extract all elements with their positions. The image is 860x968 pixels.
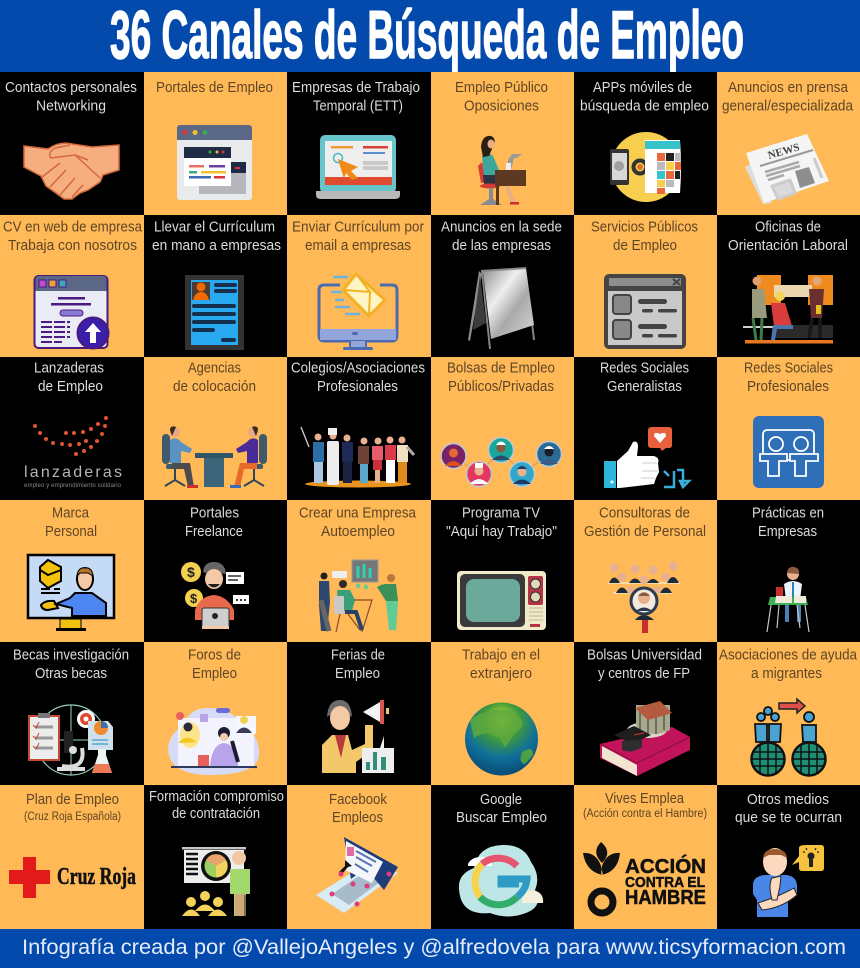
icon: Cruz Roja logo [9, 857, 136, 898]
heading: Bolsas de Empleo [447, 360, 555, 376]
heading: Oposiciones [464, 98, 539, 114]
heading [5, 79, 137, 114]
heading: Gestión de Personal [584, 523, 706, 540]
panel: Bolsas Universidad [574, 642, 717, 785]
panel: Foros de Empleo [144, 642, 287, 785]
icon: lanzaderas logo [24, 416, 122, 489]
heading: Empleo Público [455, 79, 548, 96]
icon: retro television [457, 571, 546, 630]
heading: (Acción contra el Hambre) [583, 808, 707, 820]
icon: CV sheet [185, 275, 244, 350]
heading: Profesionales [747, 378, 829, 395]
icon: training presentation [182, 847, 250, 917]
heading: Agencias [188, 360, 241, 376]
panel: Asociaciones de ayuda a migrantes [717, 642, 860, 785]
panel: Vives Emplea [574, 785, 717, 929]
heading: Lanzaderas [34, 360, 104, 376]
heading: Redes Sociales [744, 360, 833, 376]
panel: Bolsas de Empleo Públicos/Privadas [431, 357, 574, 500]
heading [587, 646, 702, 682]
heading: Trabajo en el [462, 646, 540, 664]
heading [292, 79, 420, 114]
icon: thumbs up [604, 427, 689, 488]
icon: thinking man [753, 845, 824, 917]
heading [34, 360, 104, 395]
heading: Otros medios [747, 791, 829, 808]
heading: Trabaja con nosotros [8, 237, 137, 254]
icon: student at desk [767, 567, 809, 632]
icon: Acción contra el Hambre logo: HAMBRE [625, 887, 706, 909]
heading [331, 646, 385, 682]
heading: búsqueda de empleo [580, 98, 709, 114]
icon: research tools [29, 705, 113, 775]
heading: de colocación [173, 378, 256, 395]
heading: CV en web de empresa [3, 219, 143, 236]
panel: Otros medios [717, 785, 860, 929]
icon: service window [604, 274, 686, 349]
heading [447, 360, 555, 395]
icon: handshake [24, 143, 119, 199]
heading: Generalistas [607, 378, 682, 395]
heading: APPs móviles de [593, 79, 692, 96]
heading [591, 219, 698, 254]
heading [580, 79, 709, 114]
heading: de las empresas [452, 237, 551, 254]
heading [455, 79, 548, 114]
icon: Acción contra el Hambre logo: CONTRA EL [625, 875, 705, 891]
heading: Networking [36, 98, 106, 114]
icon: candidates under magnifier [608, 562, 680, 633]
panel: Google Buscar Empleo [431, 785, 574, 929]
heading: Programa TV [462, 504, 540, 522]
heading: Crear una Empresa [299, 504, 417, 522]
heading: extranjero [470, 665, 532, 682]
heading [583, 790, 707, 820]
icon: woman at desk [478, 136, 526, 205]
heading: Servicios Públicos [591, 219, 698, 236]
icon: A-board [468, 267, 535, 349]
heading: de contratación [172, 805, 260, 822]
panel: CV en web de empresa [0, 215, 144, 357]
heading: "Aquí hay Trabajo" [446, 523, 557, 540]
icon: monitor and envelope [319, 274, 397, 350]
panel: Agencias de colocación [144, 357, 287, 500]
panel: Crear una Empresa Autoempleo [287, 500, 431, 642]
heading: Formación compromiso [149, 788, 284, 805]
heading [45, 504, 97, 540]
heading [446, 504, 557, 540]
heading: Google [480, 791, 522, 808]
heading [719, 646, 858, 682]
heading: Empresas [758, 523, 817, 540]
icon: Google G on a cloud [459, 845, 543, 916]
heading [185, 504, 243, 540]
header band [0, 0, 860, 73]
heading [292, 219, 424, 254]
panel: Marca Personal [0, 500, 144, 642]
heading [744, 360, 833, 395]
panel: Anuncios en la sede [431, 215, 574, 357]
panel: Llevar el Currículum [144, 215, 287, 357]
heading: Facebook [329, 791, 387, 808]
heading [152, 219, 281, 254]
heading: Foros de [188, 646, 241, 664]
heading: Empleo [335, 665, 380, 682]
heading [24, 791, 121, 823]
heading [462, 646, 540, 682]
panel: Consultoras de Gestión de Personal [574, 500, 717, 642]
icon: job interview [162, 426, 267, 488]
heading: en mano a empresas [152, 237, 281, 254]
heading [13, 646, 129, 682]
panel: Programa TV [431, 500, 574, 642]
panel: Trabajo en el extranjero [431, 642, 574, 785]
icon: lanzaderas logo: lanzaderas [24, 464, 122, 481]
icon: laptop with cursor [316, 135, 400, 199]
heading: de Empleo [38, 378, 103, 395]
icon: mobile apps circle [610, 132, 681, 202]
heading: Becas investigación [13, 646, 129, 664]
panel: Servicios Públicos de Empleo [574, 215, 717, 357]
heading: Marca [52, 504, 90, 522]
icon: lanzaderas logo: empleo y emprendimiento solidario [24, 483, 122, 489]
heading: Plan de Empleo [26, 791, 119, 808]
icon: laptop with social profile [316, 837, 398, 913]
panel: Ferias de Empleo [287, 642, 431, 785]
heading: Colegios/Asociaciones [291, 360, 425, 376]
heading: (Cruz Roja Española) [24, 811, 121, 823]
panel: Redes Sociales Profesionales [717, 357, 860, 500]
icon: newspaper [745, 134, 829, 204]
icon: professional network logo [753, 416, 824, 488]
heading: Oficinas de [755, 219, 821, 236]
footer credit: Infografía creada por @VallejoAngeles y @alfredovela para www.ticsyformacion.com [22, 936, 846, 959]
heading [173, 360, 256, 395]
icon: office team [743, 275, 833, 344]
icon: freelancer: $ [187, 564, 195, 580]
panel: Formación compromiso de contratación [144, 785, 287, 929]
icon: personal brand monitor [28, 555, 114, 631]
icon: migrants on globes [752, 699, 826, 776]
heading [722, 79, 854, 114]
heading [299, 504, 417, 540]
heading: Consultoras de [599, 504, 690, 522]
heading: Orientación Laboral [728, 237, 848, 254]
heading [188, 646, 241, 682]
icon: globe [465, 702, 538, 776]
panel: Portales de Empleo [144, 72, 287, 215]
heading: de Empleo [613, 237, 677, 254]
heading [735, 791, 842, 826]
panel: Colegios/Asociaciones Profesionales [287, 357, 431, 500]
heading: Llevar el Currículum [154, 219, 275, 236]
heading [149, 788, 284, 822]
icon: university on a book [600, 701, 690, 776]
heading [600, 360, 689, 395]
icon: Acción contra el Hambre logo [583, 842, 706, 913]
panel: Becas investigación [0, 642, 144, 785]
heading: Otras becas [35, 665, 107, 682]
heading [329, 791, 387, 826]
heading [584, 504, 706, 540]
heading: Anuncios en prensa [728, 79, 849, 96]
icon: connected professionals [441, 438, 562, 486]
panel: Anuncios en prensa [717, 72, 860, 215]
icon: Acción contra el Hambre logo: ACCIÓN [625, 854, 706, 878]
heading: Empleo [192, 665, 237, 682]
icon: freelancer: $ [190, 591, 198, 606]
heading: Empleos [332, 809, 383, 826]
panel: Lanzaderas de Empleo [0, 357, 144, 500]
heading: Freelance [185, 523, 243, 540]
heading: Prácticas en [752, 504, 824, 522]
heading: Personal [45, 523, 97, 540]
heading: Buscar Empleo [456, 809, 547, 826]
icon: online forum [168, 708, 259, 775]
panel: Empleo Público [431, 72, 574, 215]
panel: Contactos personales [0, 72, 144, 215]
heading: Enviar Currículum por [292, 219, 424, 236]
heading: Públicos/Privadas [448, 378, 554, 395]
heading: Temporal (ETT) [313, 98, 403, 114]
heading: Contactos personales [5, 79, 137, 96]
panel: Plan de Empleo Cruz Roja [0, 785, 144, 929]
panel: Empresas de Trabajo Temporal [287, 72, 431, 215]
heading: Bolsas Universidad [587, 646, 702, 664]
heading [456, 791, 547, 826]
panel: Facebook Empleos [287, 785, 431, 929]
heading: Autoempleo [321, 523, 395, 540]
heading: email a empresas [305, 237, 411, 254]
heading: Vives Emplea [605, 790, 685, 807]
icon: newspaper: NEWS [767, 141, 801, 162]
icon: upload window [34, 276, 108, 348]
footer band [0, 929, 860, 968]
heading: que se te ocurran [735, 809, 842, 826]
heading: Ferias de [331, 646, 385, 664]
icon: group of professionals [301, 427, 414, 488]
heading [752, 504, 824, 540]
panel: APPs móviles [574, 72, 717, 215]
panel: Portales Freelance [144, 500, 287, 642]
heading: Anuncios en la sede [441, 219, 562, 236]
heading: Profesionales [317, 378, 398, 395]
panel: Redes Sociales Generalistas [574, 357, 717, 500]
panel: Prácticas en Empresas [717, 500, 860, 642]
heading [3, 219, 143, 254]
panel: Oficinas de Orientación Laboral [717, 215, 860, 357]
heading: Portales de Empleo [156, 79, 273, 96]
icon: freelancer [181, 562, 249, 629]
icon: web portal window [177, 125, 252, 200]
heading: a migrantes [751, 665, 822, 682]
heading: y centros de FP [598, 665, 690, 682]
icon: Cruz Roja logo: Cruz Roja [57, 864, 136, 890]
panel: Enviar Currículum por email [287, 215, 431, 357]
heading: Empresas de Trabajo [292, 79, 420, 96]
icon: startup team [319, 560, 398, 632]
heading [728, 219, 848, 254]
heading [291, 360, 425, 395]
heading: Redes Sociales [600, 360, 689, 376]
heading [441, 219, 562, 254]
icon: speaker at job fair [322, 700, 409, 773]
heading: Portales [190, 504, 239, 522]
